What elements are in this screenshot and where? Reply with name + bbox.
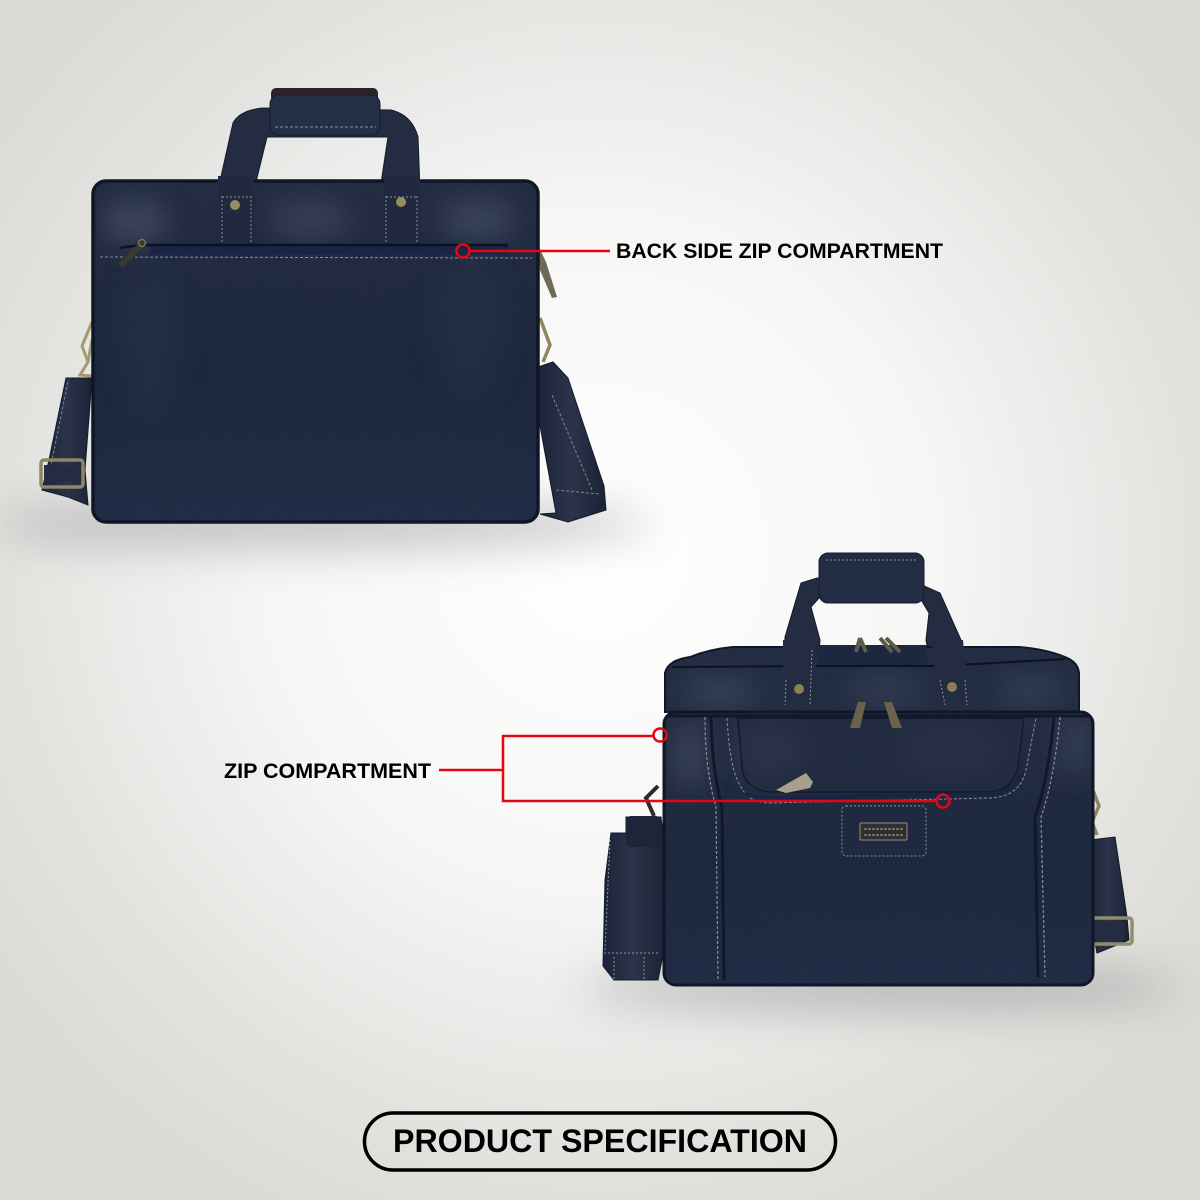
footer label: product specification: PRODUCT SPECIFICATION xyxy=(393,1123,807,1159)
bag: front view xyxy=(580,553,1180,1012)
handle mounts with rivets xyxy=(218,176,420,244)
hook for side pocket xyxy=(646,786,658,816)
callout: back side zip compartment xyxy=(456,239,943,263)
side bottle pocket xyxy=(603,816,665,980)
callout: zip compartment: ZIP COMPARTMENT xyxy=(224,759,431,783)
bag body xyxy=(93,181,538,522)
footer label: product specification xyxy=(364,1113,836,1170)
back zip pocket xyxy=(100,240,532,266)
shadow under back bag xyxy=(0,500,650,548)
leather sheen and grain xyxy=(96,184,535,519)
carry handle xyxy=(218,88,420,190)
front body xyxy=(664,712,1093,985)
carry handle xyxy=(783,553,969,708)
front zip pulls xyxy=(850,702,902,728)
left shoulder strap with buckle xyxy=(41,322,92,505)
bag: back view xyxy=(0,88,650,548)
stitched side seams and piping xyxy=(705,717,1060,980)
logo patch xyxy=(842,806,926,856)
upper compartment xyxy=(665,645,1080,715)
right shoulder strap xyxy=(538,245,606,522)
shadow under front bag xyxy=(580,964,1180,1012)
callout: back side zip compartment: BACK SIDE ZIP COMPARTMENT xyxy=(616,239,943,263)
top zip pulls xyxy=(856,638,900,652)
hang tag xyxy=(776,773,813,793)
handle mounts with rivets xyxy=(783,640,969,708)
zip tape xyxy=(668,714,1088,718)
front pocket flap xyxy=(727,718,1036,803)
right shoulder strap with buckle xyxy=(1088,788,1132,953)
callout: zip compartment xyxy=(224,728,950,808)
leather sheen and grain xyxy=(666,714,1091,794)
